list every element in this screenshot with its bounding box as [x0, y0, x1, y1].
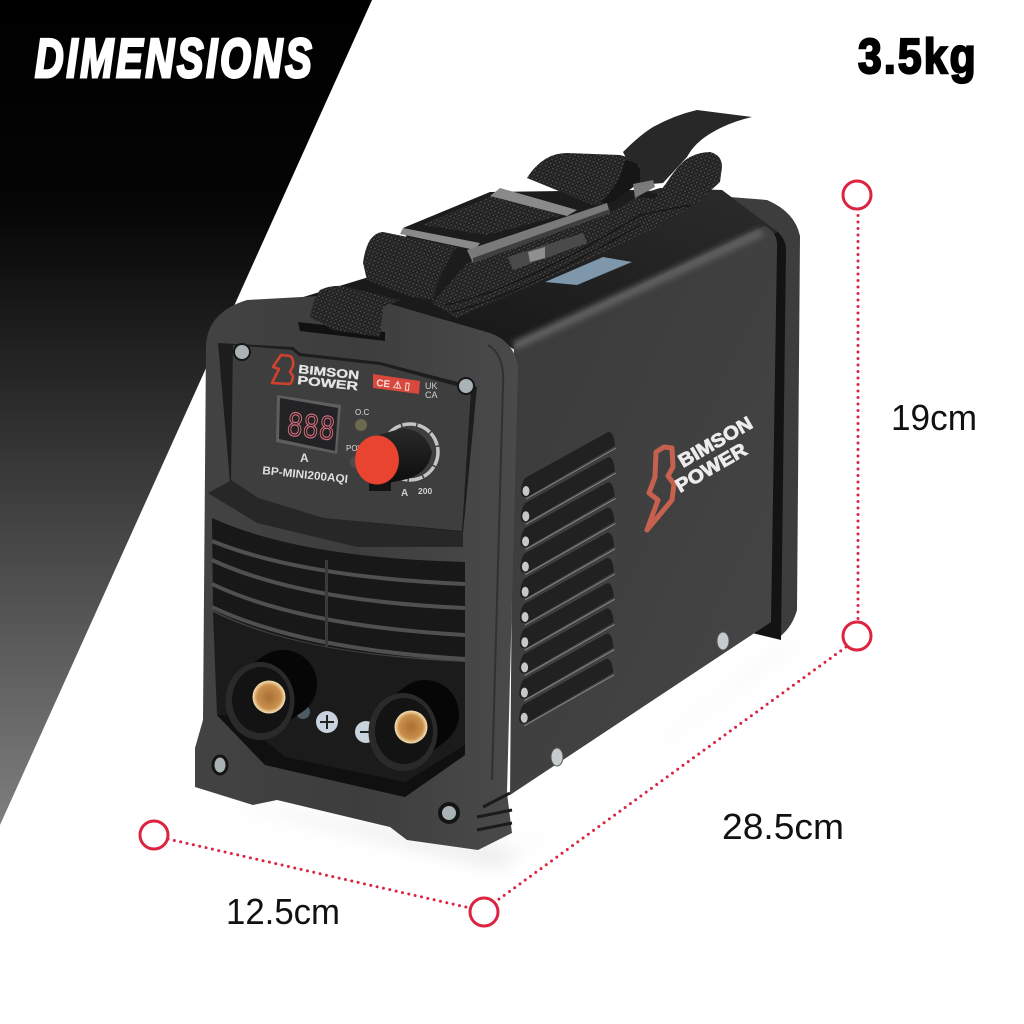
- strap right loop: [527, 153, 640, 205]
- side logo wordmark: [672, 413, 757, 497]
- length label: 28.5cm: [722, 806, 844, 847]
- welder product illustration: [195, 110, 800, 850]
- strap stitching: [445, 205, 690, 312]
- frame right edge line: [488, 345, 503, 780]
- dark channel: [745, 216, 786, 640]
- brand mark: [272, 355, 293, 384]
- dimension line: width: [140, 821, 498, 926]
- scale labels: A: [401, 488, 408, 499]
- strap lower run: [432, 197, 697, 318]
- certification sticker: [373, 374, 420, 394]
- buckle: [400, 180, 655, 270]
- scale labels: 200: [418, 486, 432, 496]
- side vents: [519, 432, 616, 726]
- title: DIMENSIONS: [35, 29, 315, 90]
- UK CA mark: CA: [425, 390, 438, 400]
- width label: 12.5cm: [226, 891, 340, 932]
- recess shadow: [218, 343, 477, 533]
- dark band under panel: [208, 480, 463, 547]
- side logo: [647, 413, 757, 530]
- UK CA mark: UK: [425, 381, 438, 391]
- power label and LED: POWER: [346, 444, 376, 453]
- back flange: [640, 190, 800, 638]
- O.C label and LED: O.C: [355, 408, 369, 417]
- corner screw right: [458, 378, 474, 394]
- display unit: A: [300, 451, 309, 465]
- foot screw right: [440, 804, 458, 822]
- digital display: 888: [285, 406, 337, 451]
- brand wordmark: POWER: [297, 373, 359, 393]
- scale labels: [401, 486, 432, 499]
- dimension line: length: [495, 647, 846, 902]
- carry strap: [310, 110, 752, 337]
- strap tail: [623, 110, 752, 185]
- dimension line: height: [843, 181, 871, 650]
- weight label: 3.5kg: [858, 28, 978, 84]
- floor shadow: [215, 640, 800, 868]
- front strap tab: [310, 286, 400, 337]
- lower lip shade: [217, 715, 465, 797]
- model number: BP-MINI200AQI: [262, 465, 348, 486]
- UK CA mark: [425, 381, 438, 400]
- brand wordmark: [297, 362, 360, 393]
- positive terminal: [226, 662, 294, 740]
- panel face: [231, 345, 471, 531]
- top face: [300, 188, 778, 350]
- control panel: [218, 343, 477, 533]
- certification sticker: CE ⚠ ▯: [376, 378, 411, 393]
- side logo wordmark: BIMSON: [675, 413, 757, 472]
- minus symbol: [355, 721, 377, 743]
- brand wordmark: BIMSON: [298, 362, 360, 382]
- embossed plus: [296, 705, 310, 719]
- front vent grille: [208, 480, 465, 660]
- banner: black to grey diagonal: [0, 0, 372, 825]
- knob: [355, 428, 432, 491]
- strap base fill: [403, 190, 697, 318]
- side screws: [551, 632, 729, 766]
- side panel: [510, 226, 777, 795]
- ridge highlight: [514, 232, 762, 346]
- corner screw left: [234, 344, 250, 360]
- strap upper run: [422, 195, 563, 235]
- strap left loop: [363, 232, 457, 300]
- side logo mark: [647, 447, 674, 530]
- dial scale: [382, 424, 438, 480]
- strap loop interior: [600, 160, 640, 203]
- height label: 19cm: [891, 397, 977, 438]
- side logo wordmark: POWER: [672, 439, 751, 497]
- back strap loop: [650, 152, 722, 205]
- plus symbol: [316, 711, 338, 733]
- power label and LED: [346, 444, 376, 468]
- front frame: [195, 296, 518, 850]
- negative terminal: [368, 693, 438, 771]
- top sticker: [545, 257, 632, 285]
- strap slot: [298, 322, 385, 341]
- digital display: [276, 395, 341, 454]
- foot screw left: [213, 756, 227, 774]
- foot ridges: [477, 793, 512, 830]
- O.C label and LED: [355, 408, 369, 431]
- terminal recess: [213, 612, 465, 797]
